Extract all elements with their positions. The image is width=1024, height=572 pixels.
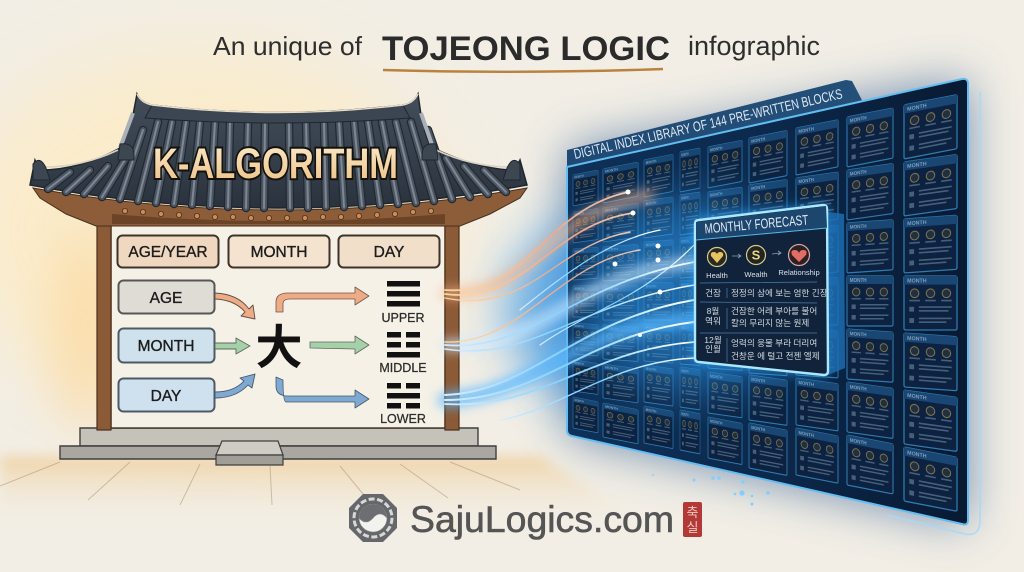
column 3: MONTH: [646, 242, 657, 247]
column 3: MONTH: [646, 159, 657, 165]
column 1: MONTH: [574, 173, 584, 180]
column 1: MONTH: [574, 286, 584, 291]
forecast table: 정정의 삼에 보는 엄한 긴장: [731, 287, 828, 298]
forecast table: 엉력의 웅물 부라 더리여: [731, 337, 817, 348]
particles under panel: [652, 474, 770, 506]
column 9: MONTH: [907, 393, 927, 402]
input boxes: [118, 280, 214, 412]
logo footer: [349, 494, 702, 542]
trigram: middle: [379, 332, 427, 375]
trigram: lower: LOWER: [380, 412, 426, 426]
column 7: MONTH: [799, 126, 814, 134]
column 5: MONTH: [710, 374, 723, 380]
column 6: [749, 131, 787, 475]
icon: health: [706, 248, 728, 280]
column 7: MONTH: [799, 279, 814, 285]
column 9: MONTH: [907, 278, 927, 284]
column 9: [904, 95, 957, 511]
header buttons: [118, 236, 440, 268]
column 5: MONTH: [710, 146, 723, 153]
forecast table: 인월: [705, 343, 721, 354]
forecast table: 칼의 무리지 않는 원제: [731, 318, 809, 328]
column 2: MONTH: [605, 365, 618, 371]
column 8: MONTH: [850, 384, 867, 393]
forecast table: 건잠한 어레 부아를 불어: [731, 306, 817, 316]
blue streams: [445, 230, 694, 420]
trigrams: [379, 281, 427, 426]
column 1: MONTH: [574, 361, 584, 366]
outer glass frame: [887, 92, 980, 534]
panel body: [567, 79, 968, 524]
column 1: [573, 170, 598, 433]
icon: wealth: [744, 246, 768, 279]
red seal: 축: [687, 505, 699, 520]
icon: relationship: [778, 244, 820, 277]
building: hanok: [30, 94, 527, 465]
column 3: MONTH: [646, 366, 657, 372]
title: infographic: [688, 31, 820, 61]
site name: SajuLogics.com: [410, 498, 674, 540]
button: day: [338, 236, 440, 268]
column 1: MONTH: [574, 211, 584, 217]
input arrows: [215, 293, 255, 398]
column 7: MONTH: [799, 177, 814, 184]
column 5: [708, 140, 742, 465]
icon: health: Health: [706, 271, 728, 280]
orange streams: [445, 192, 640, 342]
column 2: MONTH: [605, 167, 618, 174]
column 5: MONTH: [710, 419, 723, 426]
forecast table: 8월: [707, 305, 719, 316]
column 9: MONTH: [907, 103, 927, 113]
column 2: MONTH: [605, 326, 618, 331]
button: month: MONTH: [251, 244, 307, 261]
input: age: AGE: [150, 290, 182, 307]
wooden posts: [97, 216, 459, 430]
output arrows: [276, 287, 369, 408]
column 7: MONTH: [799, 228, 814, 235]
column 3: MONTH: [646, 284, 657, 289]
red seal: [683, 502, 702, 537]
arrow: wealth to relationship: [772, 251, 781, 255]
column 2: MONTH: [605, 287, 618, 291]
button: age/year: [118, 236, 218, 268]
red seal: 실: [687, 520, 698, 535]
column 3: MONTH: [646, 200, 657, 206]
title: An unique of: [213, 31, 363, 61]
column 6: MONTH: [751, 136, 765, 144]
column 8: MONTH: [850, 278, 867, 284]
column 8: MONTH: [850, 437, 867, 447]
panel: digital index library: [567, 79, 980, 534]
tiled roof: [30, 94, 527, 208]
column 1: MONTH: [574, 398, 584, 404]
panel tab: DIGITAL INDEX LIBRARY OF 144 PRE-WRITTEN BLOCKS: [572, 85, 844, 162]
soft stream glow: [445, 195, 700, 400]
column 1: MONTH: [574, 324, 584, 329]
column 5: MONTH: [710, 284, 723, 288]
column 4: [680, 148, 700, 454]
popup header: MONTHLY FORECAST: [704, 211, 809, 236]
column 1: MONTH: [574, 249, 584, 254]
column 2: [603, 162, 638, 444]
column 8: MONTH: [850, 331, 867, 338]
title: [213, 30, 820, 72]
warm glow behind building: [0, 50, 450, 410]
column 2: MONTH: [605, 405, 618, 411]
column 8: MONTH: [850, 169, 867, 178]
forecast table: 건잠: [705, 288, 721, 298]
column 5: MONTH: [710, 329, 723, 334]
stone platform: [60, 428, 496, 465]
column 7: MONTH: [799, 430, 814, 438]
popup card: [695, 205, 828, 375]
column 5: MONTH: [710, 192, 723, 198]
trigram: upper: [381, 281, 425, 325]
column 3: MONTH: [646, 407, 657, 414]
column 9: MONTH: [907, 220, 927, 227]
stacked back sheet: [828, 212, 845, 375]
panel tab: [567, 80, 864, 170]
column 4: MONTH: [681, 151, 689, 158]
input: month: MONTH: [138, 338, 194, 355]
column 8: [847, 108, 893, 494]
roof title: K-ALGORITHM: [153, 140, 398, 188]
button: day: DAY: [374, 244, 404, 261]
trigram: upper: UPPER: [381, 311, 425, 325]
logo: bagua taegeuk: [349, 494, 397, 542]
column 4: MONTH: [681, 368, 689, 374]
icon: wealth: Wealth: [744, 270, 768, 279]
column 6: MONTH: [751, 425, 765, 433]
eaves and rafters: [33, 188, 527, 226]
column 5: MONTH: [710, 238, 723, 243]
column 6: MONTH: [751, 376, 765, 384]
column 9: MONTH: [907, 450, 927, 460]
icon: relationship: Relationship: [778, 268, 820, 277]
button: month: [228, 236, 330, 268]
blue haze around panel: [567, 80, 968, 525]
title underline: [383, 69, 663, 72]
central character: 大: [256, 309, 302, 378]
column 8: MONTH: [850, 223, 867, 231]
popup: monthly forecast: [695, 205, 845, 375]
input: day: DAY: [151, 388, 181, 405]
wall panel: [111, 222, 445, 428]
grid of month blocks: [573, 95, 957, 511]
column 7: [796, 120, 838, 483]
warm glow at the left of the building: [50, 230, 120, 430]
icon: wealth: S: [752, 248, 761, 262]
column 4: MONTH: [681, 325, 689, 331]
forecast table: 역워: [705, 316, 721, 326]
wooden floor: [0, 456, 640, 520]
popup glow: [695, 205, 828, 375]
column 4: MONTH: [681, 411, 689, 418]
column 4: MONTH: [681, 238, 689, 244]
forecast table: 건창운 에 털고 전젠 엘제: [731, 350, 820, 361]
title: TOJEONG LOGIC: [382, 30, 670, 68]
column 4: MONTH: [681, 195, 689, 201]
column 6: MONTH: [751, 233, 765, 239]
forecast table: [700, 282, 828, 362]
column 9: MONTH: [907, 161, 927, 170]
trigram: middle: MIDDLE: [379, 361, 427, 375]
blue energy glow: [505, 220, 695, 400]
data streams from building to panel: [445, 190, 700, 420]
column 2: MONTH: [605, 247, 618, 252]
column 6: MONTH: [751, 184, 765, 191]
forecast table: 12월: [704, 334, 722, 345]
column 2: MONTH: [605, 207, 618, 213]
popup header: [696, 206, 827, 240]
button: age/year: AGE/YEAR: [128, 244, 208, 261]
column 3: MONTH: [646, 325, 657, 330]
spark points: [612, 190, 662, 337]
panel inner glow: [580, 200, 800, 390]
trigram: lower: [380, 383, 426, 426]
column 7: MONTH: [799, 380, 814, 387]
column 4: MONTH: [681, 282, 689, 287]
column 6: MONTH: [751, 281, 765, 286]
column 9: MONTH: [907, 336, 927, 343]
column 7: MONTH: [799, 330, 814, 336]
column 6: MONTH: [751, 329, 765, 336]
column 3: [644, 154, 673, 449]
column 8: MONTH: [850, 115, 867, 125]
arrow: health to wealth: [732, 254, 741, 258]
